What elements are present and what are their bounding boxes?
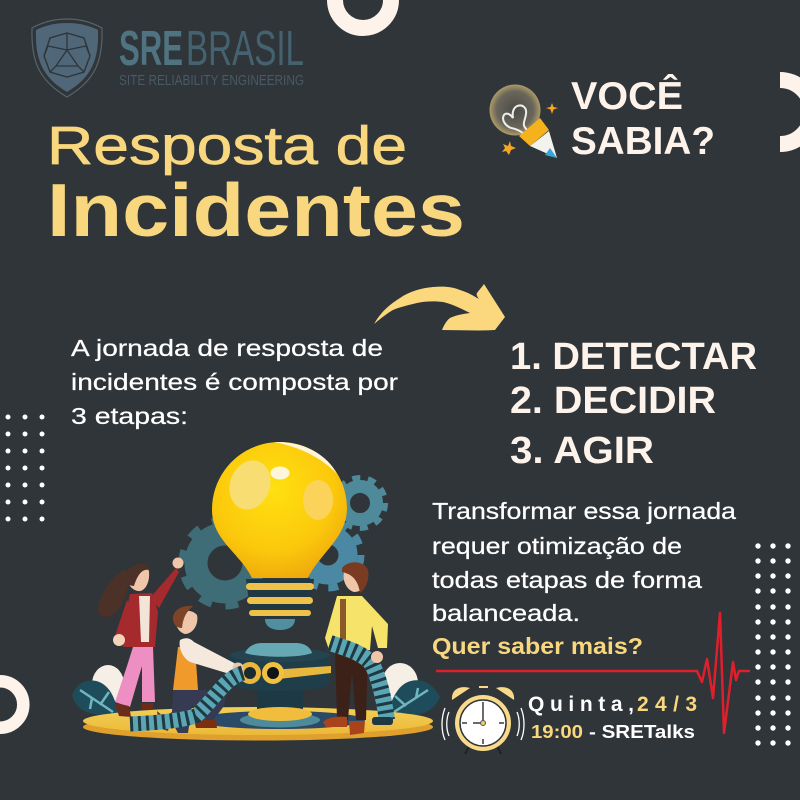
steps list: 1. DETECTAR <box>510 336 757 378</box>
steps list <box>510 336 757 472</box>
steps list: 3. AGIR <box>510 430 654 472</box>
title: Resposta de <box>47 116 407 176</box>
dot grid: left <box>6 414 44 522</box>
standing man <box>323 562 393 735</box>
intro text <box>71 335 398 429</box>
steps list: 2. DECIDIR <box>510 380 716 422</box>
logo shield <box>32 19 102 97</box>
lamp base <box>230 643 331 721</box>
event time <box>531 722 695 742</box>
closing text: requer otimização de <box>432 533 682 559</box>
title <box>47 116 465 252</box>
logo: SRE Brasil <box>32 19 304 97</box>
closing text: Transformar essa jornada <box>432 498 736 524</box>
decorative ring: top <box>335 0 391 28</box>
kneeling man <box>157 606 244 733</box>
medium gear right <box>295 522 361 588</box>
small gear top right <box>335 478 385 528</box>
decorative half ring: right <box>780 80 800 144</box>
closing text: balanceada. <box>432 600 580 626</box>
event time: 19:00 <box>531 722 583 742</box>
dot grid: right <box>755 543 791 746</box>
title: Incidentes <box>47 168 465 252</box>
intro text: incidentes é composta por <box>71 369 398 395</box>
event date <box>528 693 697 716</box>
hose <box>130 673 243 724</box>
platform <box>83 707 433 740</box>
intro text: 3 etapas: <box>71 403 188 429</box>
event time: - SRETalks <box>589 722 695 742</box>
logo: SRE Brasil: BRASIL <box>186 22 304 76</box>
closing text <box>432 498 736 626</box>
closing text: todas etapas de forma <box>432 567 702 593</box>
bulb <box>212 442 347 630</box>
arrow <box>374 284 505 330</box>
heading: você sabia: VOCÊ <box>571 74 683 118</box>
logo tagline: SITE RELIABILITY ENGINEERING <box>119 72 304 89</box>
call to action: Quer saber mais? <box>432 633 643 659</box>
heading: você sabia <box>571 74 715 163</box>
illustration: team around light bulb <box>72 442 440 740</box>
logo wordmark: SRE <box>119 22 183 76</box>
icon: alarm clock <box>442 687 524 754</box>
heading: você sabia: SABIA? <box>571 120 715 163</box>
plants <box>72 663 440 716</box>
event date: Quinta, <box>528 693 634 716</box>
event date: 24/3 <box>637 693 697 716</box>
intro text: A jornada de resposta de <box>71 335 383 361</box>
decorative half ring: left <box>0 681 23 728</box>
woman <box>98 558 184 717</box>
large gear left <box>182 520 268 606</box>
heartbeat line <box>436 613 750 733</box>
icon: light bulb pencil <box>490 84 558 158</box>
